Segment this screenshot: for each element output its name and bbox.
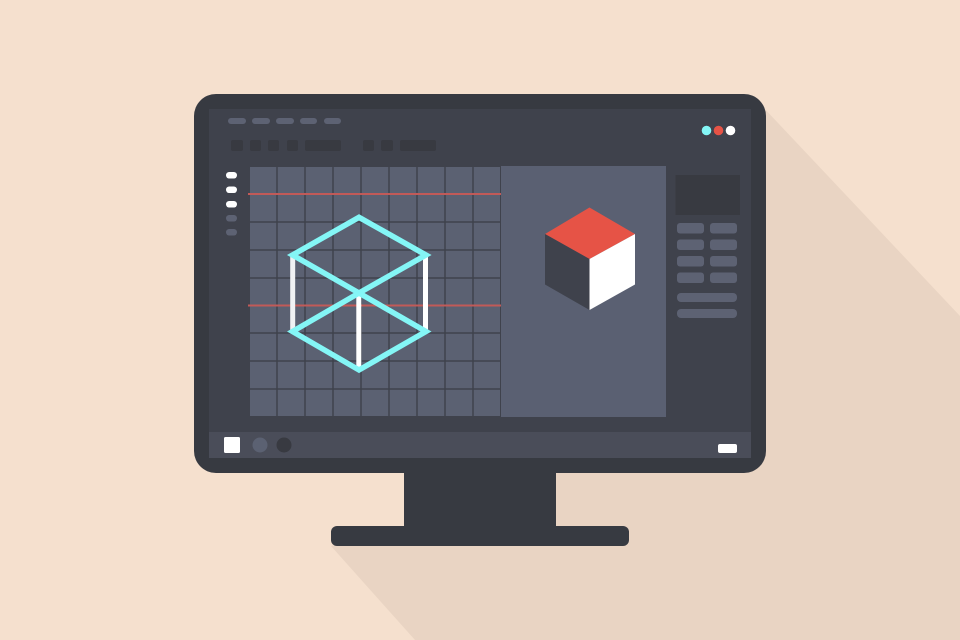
- properties buttons: [677, 223, 737, 318]
- toolbar buttons: [231, 140, 436, 151]
- monitor bezel: [194, 94, 766, 473]
- wireframe cube: [292, 217, 426, 370]
- properties thumbnail: [676, 175, 740, 215]
- menu pills: [228, 118, 341, 124]
- side tool pills: [226, 172, 237, 236]
- monitor stand: [331, 470, 629, 546]
- bottom status bar: [209, 432, 751, 458]
- window control dots: [702, 126, 735, 135]
- screen: [209, 109, 751, 458]
- preview panel: [501, 166, 666, 417]
- red guide lines: [248, 193, 501, 306]
- drawing grid: [250, 167, 500, 416]
- solid cube: [545, 208, 635, 310]
- long shadow: [331, 106, 960, 640]
